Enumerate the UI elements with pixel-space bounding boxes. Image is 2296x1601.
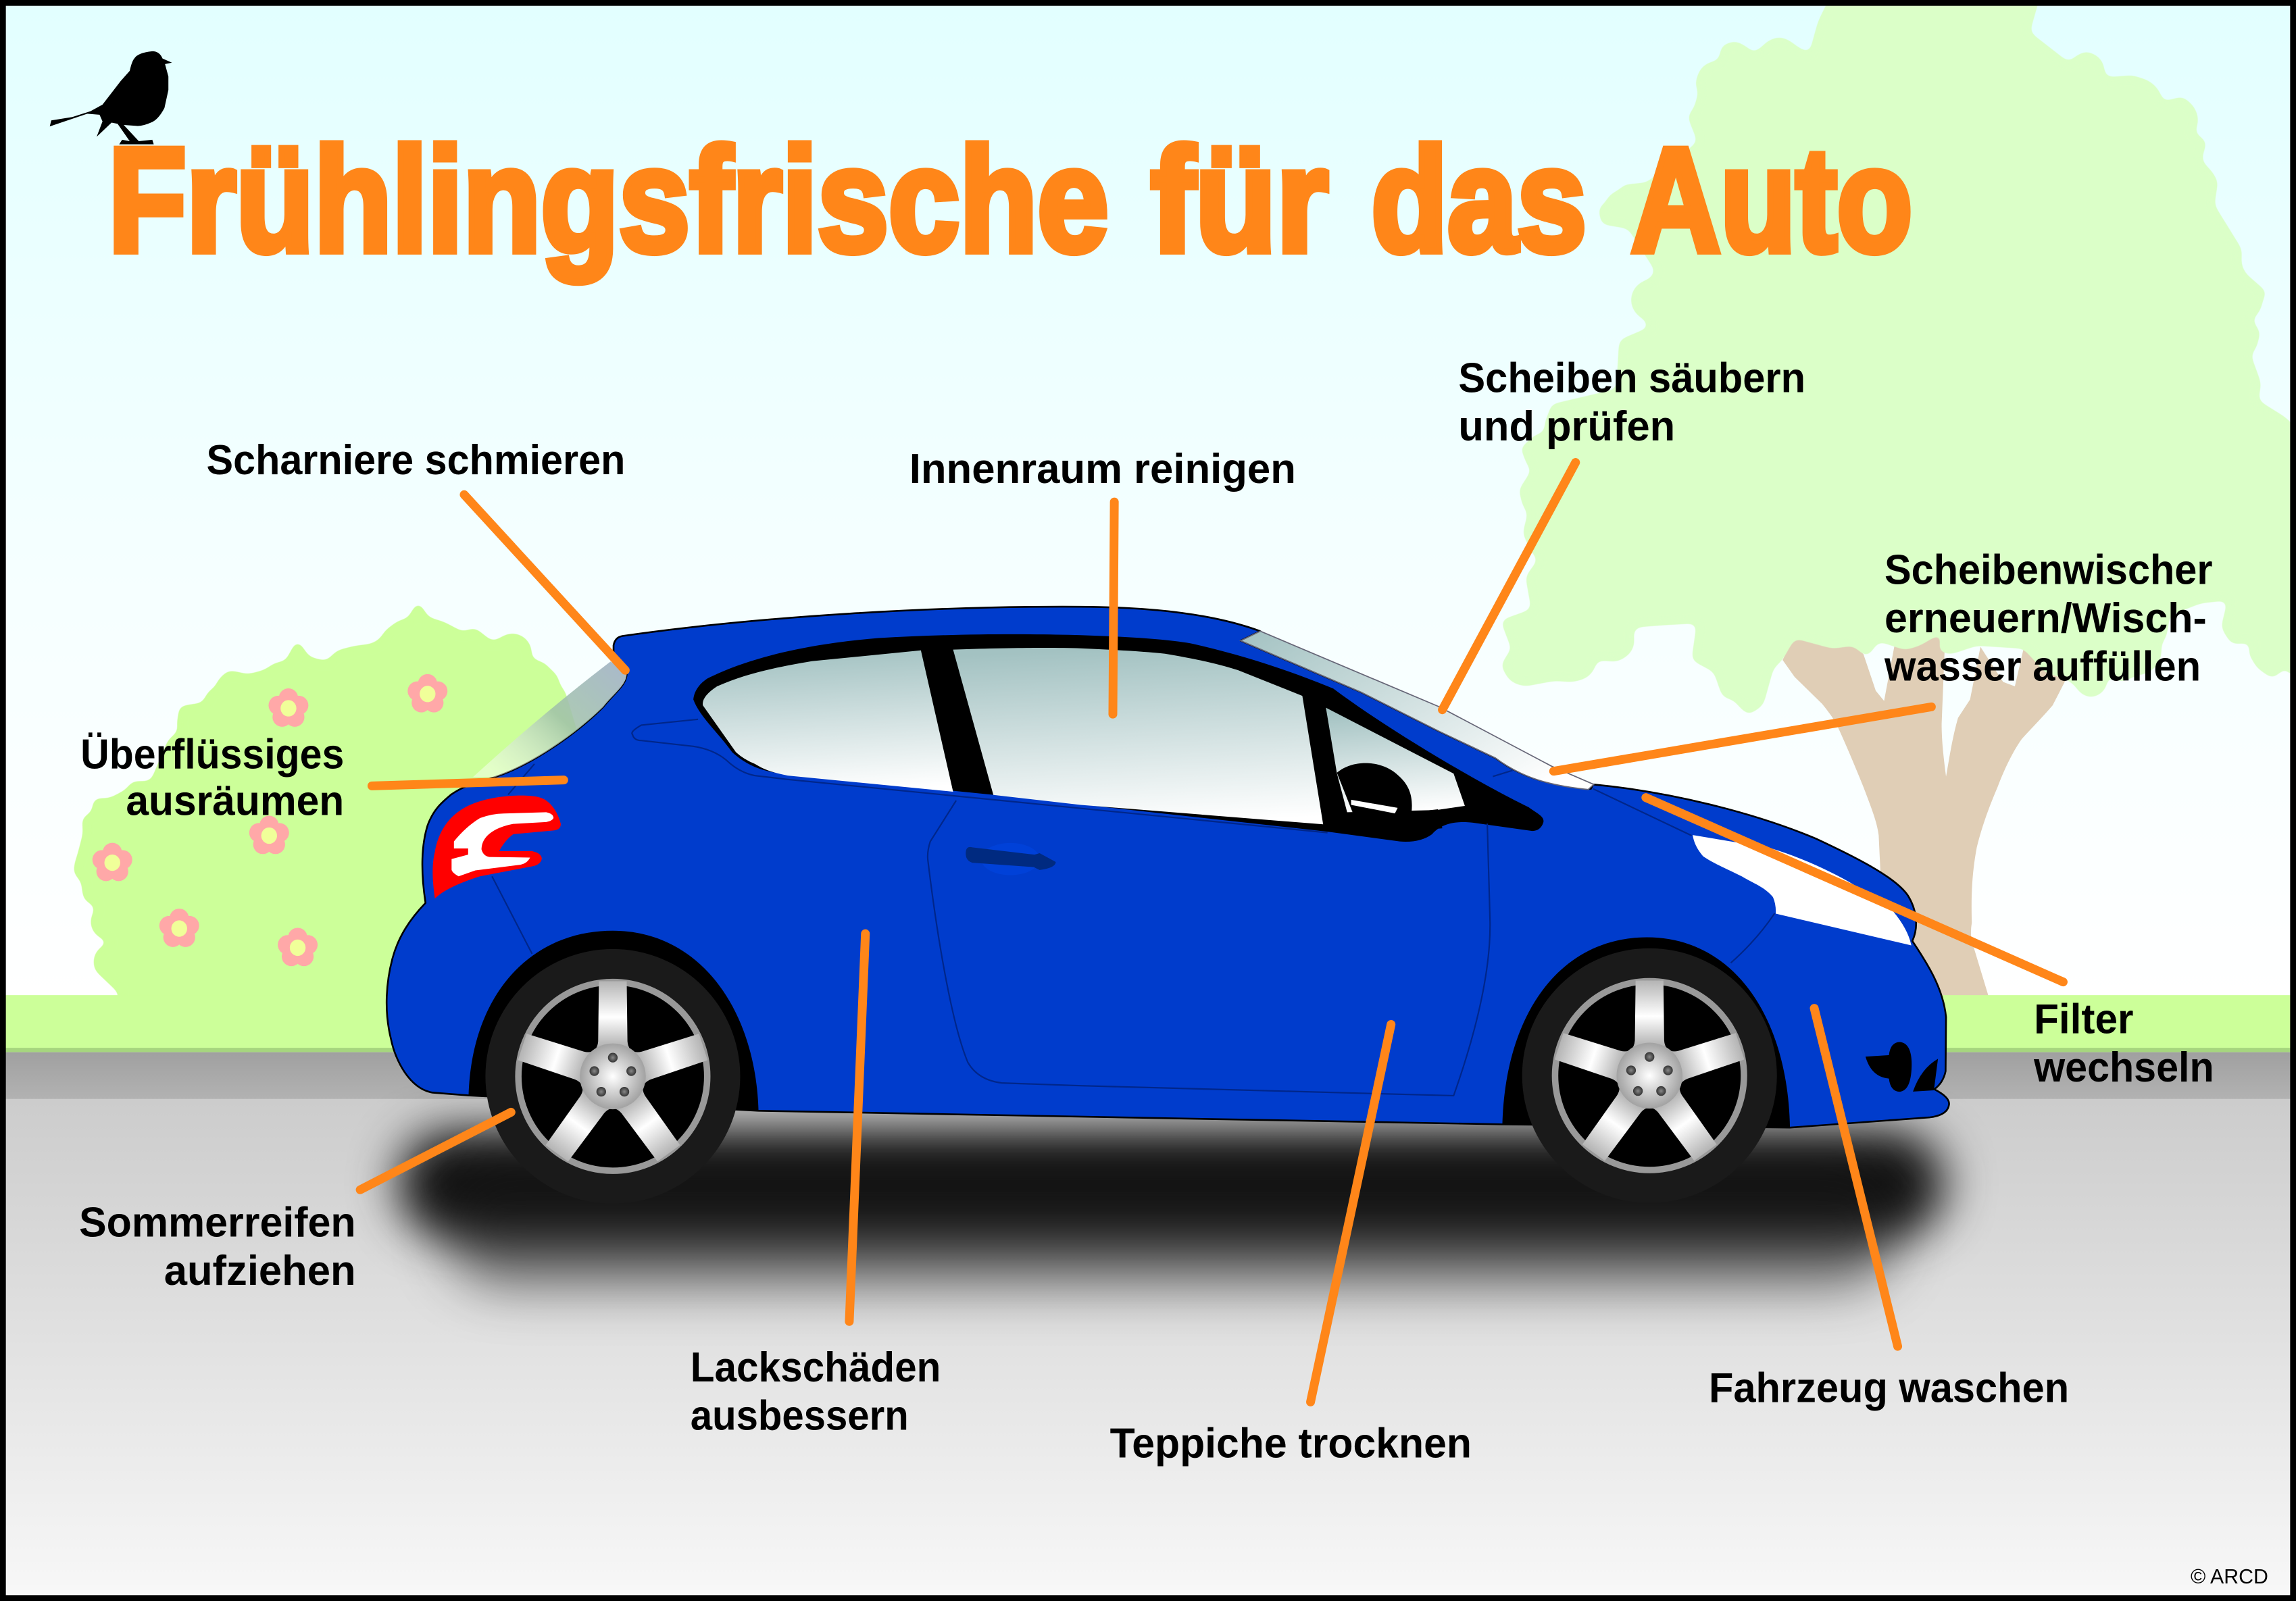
pointer line [464,494,625,670]
label text [1884,547,2212,690]
pointer line [1311,1024,1391,1402]
windshield [1241,631,1594,790]
label text: erneuern/Wisch- [1885,595,2207,642]
label text: Fahrzeug waschen [1709,1365,2069,1411]
pointer line [849,934,866,1321]
headlight [1693,835,1912,945]
door window [953,648,1323,824]
label text [691,1344,941,1440]
callout: Scheiben säubern und prüfen [1443,355,1805,710]
pointer line [1443,463,1576,710]
label text: aufziehen [164,1248,356,1294]
callout: Scharniere schmieren [207,437,625,670]
title: das [1371,118,1587,283]
label text: ausräumen [126,778,344,825]
tree canopy [1500,0,2296,715]
rear side window [703,651,953,792]
label text [1458,355,1805,450]
callout: Überflüssiges ausräumen [80,731,564,825]
flower 2 [407,674,447,713]
rear hatch glass [473,661,627,777]
label text: Sommerreifen [79,1200,356,1246]
callout: Scheibenwischer erneuern [1553,547,2212,771]
title: für [1151,118,1328,283]
rear wheel [485,949,740,1204]
pointer line [360,1112,511,1190]
pointer line [1646,798,2063,982]
car shadow [398,1129,1945,1285]
front wheel [1522,948,1777,1203]
quarter window [1326,708,1465,812]
pavement foreground [0,1099,2296,1601]
label text: Teppiche trocknen [1110,1421,1472,1467]
car [386,607,1949,1204]
pointer line [372,780,564,786]
label text [79,1200,356,1294]
callout: Lackschäden ausbessern [691,934,941,1440]
tail light [432,796,561,898]
flower 6 [278,927,318,966]
label text: Lackschäden [691,1344,941,1391]
label text: Filter [2034,996,2133,1042]
wing mirror [1337,763,1443,836]
fog lamp [1866,1042,1938,1092]
label text [2033,996,2214,1091]
tree trunk [1782,631,2066,998]
label text: Scheiben säubern [1458,355,1805,402]
door handle [966,843,1055,875]
callout: Sommerreifen aufziehen [79,1112,511,1294]
flower 1 [268,688,308,727]
front wheel arch [1502,938,1790,1127]
car body [386,607,1949,1127]
grass strip [0,995,2296,1052]
title: Auto [1631,118,1912,283]
label text: ausbessern [691,1393,909,1440]
flowering bush [73,601,586,1010]
callout: Fahrzeug waschen [1709,1009,2069,1411]
title [108,118,1912,283]
copyright: © ARCD [2191,1566,2268,1588]
callout: Teppiche trocknen [1110,1024,1472,1467]
door and body lines [492,719,1775,1096]
flower 5 [159,909,199,947]
label text: und prüfen [1458,403,1675,450]
label text: wechseln [2033,1044,2214,1091]
flower 3 [249,816,289,854]
callout: Filter wechseln [1646,798,2214,1091]
label text: wasser auffüllen [1884,643,2201,690]
label text: Überflüssiges [80,731,344,778]
label text: Scharniere schmieren [207,437,625,484]
road band [0,1052,2296,1099]
label text: Scheibenwischer [1885,547,2212,593]
label text [80,731,344,825]
pointer line [1553,707,1931,771]
pointer line [1814,1009,1898,1346]
window frame [693,634,1543,842]
sky background [0,0,2296,998]
bird on the title [50,51,172,145]
pointer line [1113,502,1114,714]
rear wheel arch [468,931,759,1111]
label text: Innenraum reinigen [909,446,1296,492]
flower 4 [93,843,132,881]
title: Frühlingsfrische [108,118,1108,283]
